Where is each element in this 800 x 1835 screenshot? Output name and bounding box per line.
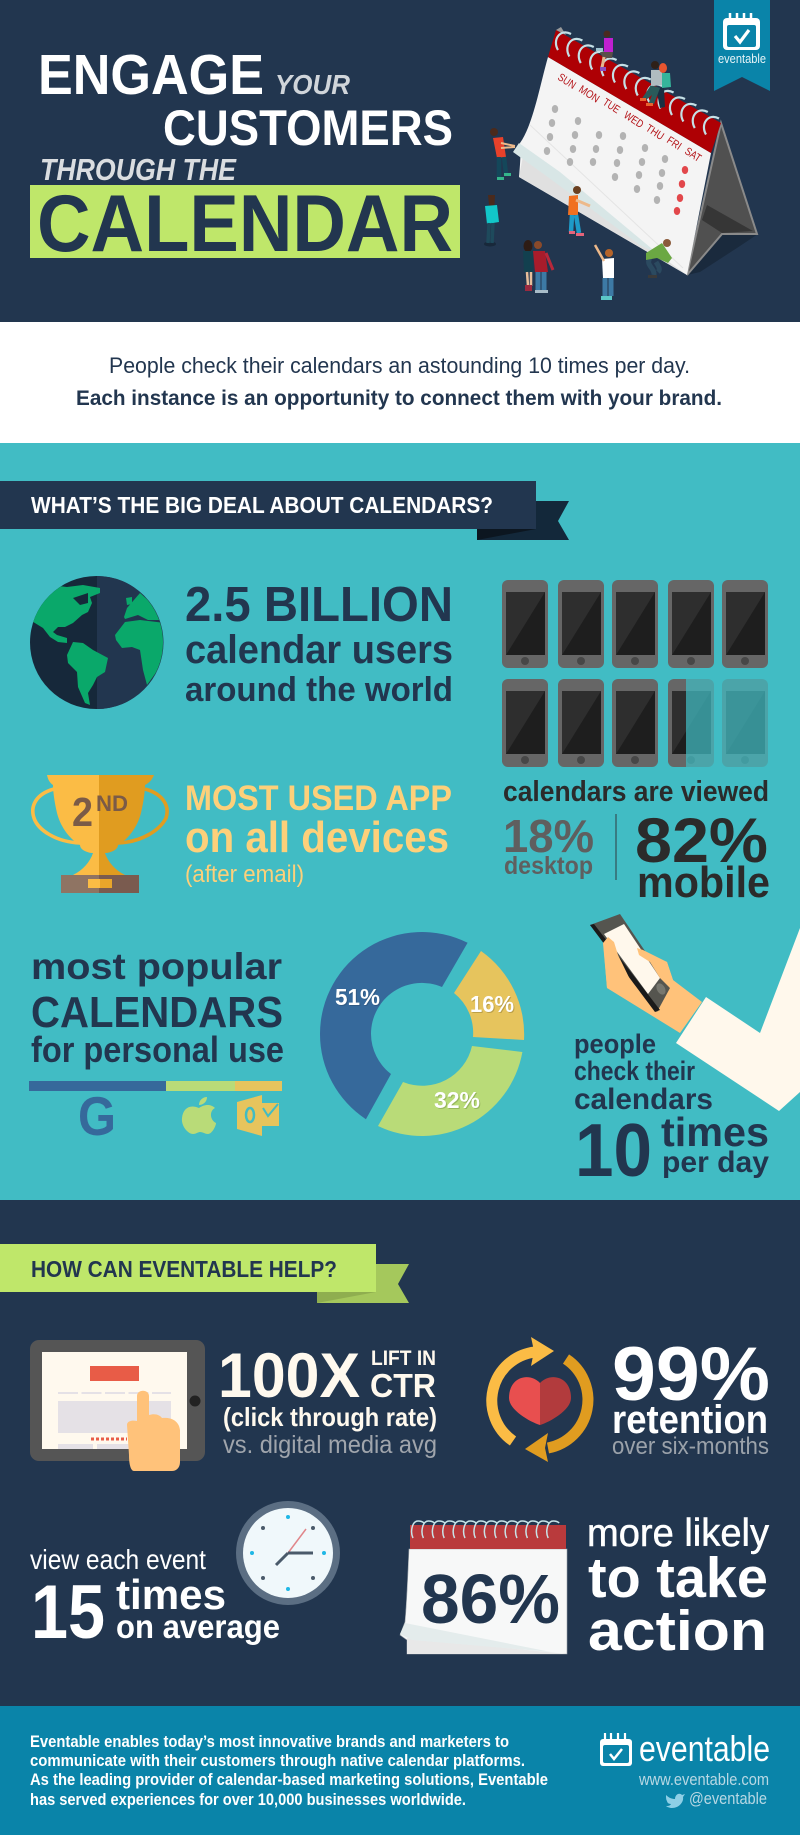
icon: globe bbox=[30, 576, 165, 709]
stat: 99 percent retention: retention bbox=[612, 1398, 768, 1442]
heading: most popular calendars bbox=[31, 946, 284, 1070]
stat: ten checks per day: check their bbox=[574, 1056, 695, 1086]
person: couple standing bbox=[523, 240, 553, 293]
title: YOUR bbox=[275, 69, 351, 100]
stat: ten checks per day: times bbox=[661, 1109, 769, 1155]
icon: google: G bbox=[78, 1085, 116, 1147]
stat: ten checks per day: per day bbox=[662, 1146, 769, 1179]
heading: most popular calendars: most popular bbox=[31, 946, 282, 987]
stat: 15 views on average: times bbox=[116, 1571, 226, 1618]
stat: ten checks per day bbox=[574, 1029, 769, 1192]
heading ribbon: big deal: WHAT’S THE BIG DEAL ABOUT CALENDARS? bbox=[31, 492, 493, 518]
footer text: As the leading provider of calendar-based marketing solutions, Eventable bbox=[30, 1770, 548, 1789]
title: ENGAGE bbox=[38, 43, 264, 107]
stat: 100x lift in ctr: (click through rate) bbox=[223, 1402, 437, 1432]
intro text: People check their calendars an astounding 10 times per day. bbox=[109, 353, 690, 378]
slice: outlook 16 percent bbox=[454, 951, 524, 1040]
stat: 2.5 billion users: calendar users bbox=[185, 628, 453, 672]
stat: calendars viewed desktop vs mobile: calendars are viewed bbox=[503, 776, 769, 808]
icon: apple bbox=[182, 1097, 216, 1134]
stat: calendars viewed desktop vs mobile: desktop bbox=[504, 852, 593, 880]
intro text bbox=[76, 353, 722, 410]
stat: 100x lift in ctr bbox=[218, 1341, 437, 1459]
stat: 15 views on average: view each event bbox=[30, 1544, 206, 1575]
heading ribbon: big deal bbox=[0, 481, 569, 540]
footer links: www.eventable.com bbox=[638, 1770, 769, 1789]
person: seated couple on top bbox=[640, 61, 671, 108]
icon: heart with retention arrows bbox=[492, 1337, 588, 1462]
stat: most used app: on all devices bbox=[185, 813, 449, 862]
heading ribbon: how can eventable help: HOW CAN EVENTABLE HELP? bbox=[31, 1256, 337, 1282]
stat: 15 views on average: on average bbox=[116, 1608, 280, 1645]
stat: most used app bbox=[185, 779, 452, 888]
icon: eventable badge bbox=[714, 0, 770, 91]
heading: most popular calendars: CALENDARS bbox=[31, 988, 283, 1037]
title: CALENDAR bbox=[37, 179, 453, 269]
heading: most popular calendars: for personal use bbox=[31, 1029, 284, 1070]
title: THROUGH THE bbox=[40, 152, 237, 187]
icon: tear-off calendar page bbox=[400, 1521, 567, 1654]
illustration: desk calendar with people: SUN bbox=[555, 71, 578, 92]
person: man in green lifting page bbox=[646, 239, 672, 278]
donut labels: 51% bbox=[336, 985, 381, 1011]
stat: most used app: (after email) bbox=[185, 861, 304, 888]
icon: trophy: ND bbox=[96, 791, 128, 816]
donut labels: 16% bbox=[471, 992, 515, 1018]
stat: 100x lift in ctr: CTR bbox=[370, 1367, 436, 1404]
stat: calendars viewed desktop vs mobile: 18% bbox=[503, 810, 594, 862]
donut labels: 16% bbox=[470, 991, 514, 1017]
stat: 15 views on average bbox=[30, 1544, 280, 1655]
footer text: communicate with their customers through native calendar platforms. bbox=[30, 1751, 525, 1770]
icon: eventable badge: eventable bbox=[718, 51, 766, 66]
footer logo bbox=[600, 1728, 770, 1769]
stat: calendars viewed desktop vs mobile bbox=[503, 776, 770, 907]
stat: 100x lift in ctr: vs. digital media avg bbox=[223, 1431, 437, 1459]
stat: 99 percent retention bbox=[612, 1332, 770, 1460]
illustration: desk calendar with people bbox=[484, 27, 758, 300]
stat: ten checks per day: people bbox=[574, 1029, 656, 1059]
icon: twitter bird bbox=[666, 1794, 685, 1808]
person: man in orange pushing page bbox=[568, 186, 590, 236]
stat: 99 percent retention: over six-months bbox=[612, 1433, 769, 1460]
illustration: desk calendar with people: WED bbox=[621, 109, 646, 131]
footer text: has served experiences for over 10,000 businesses worldwide. bbox=[30, 1790, 466, 1809]
illustration: desk calendar with people: MON bbox=[576, 83, 601, 106]
donut labels: 51% bbox=[335, 984, 380, 1010]
icon: tablet with tapping hand bbox=[30, 1340, 205, 1471]
illustration: desk calendar with people: TUE bbox=[600, 96, 622, 116]
footer text: Eventable enables today’s most innovative brands and marketers to bbox=[30, 1732, 509, 1751]
donut labels: 32% bbox=[435, 1088, 481, 1114]
donut chart: calendar share bbox=[320, 932, 524, 1136]
icon: outlook bbox=[237, 1095, 279, 1136]
icon: trophy: 2 bbox=[72, 789, 93, 835]
donut labels: 32% bbox=[434, 1087, 480, 1113]
stat: 2.5 billion users bbox=[185, 578, 453, 709]
stat: more likely to take action bbox=[587, 1512, 769, 1663]
person: man in red pulling page bbox=[490, 128, 515, 180]
illustration: desk calendar with people: SAT bbox=[682, 145, 703, 165]
stat: 100x lift in ctr: LIFT IN bbox=[371, 1347, 436, 1370]
stat: most used app: MOST USED APP bbox=[185, 779, 452, 818]
stat: more likely to take action: action bbox=[588, 1599, 767, 1663]
stat: ten checks per day: calendars bbox=[574, 1083, 713, 1116]
stat: 99 percent retention: 99% bbox=[612, 1332, 770, 1417]
icon: trophy bbox=[33, 775, 167, 893]
donut labels bbox=[335, 984, 515, 1114]
illustration: desk calendar with people: FRI bbox=[664, 134, 683, 153]
icon: tear-off calendar page: 86% bbox=[421, 1560, 560, 1638]
person: seated woman on top bbox=[596, 30, 613, 71]
intro text: Each instance is an opportunity to connect them with your brand. bbox=[76, 387, 722, 410]
stat: more likely to take action: to take bbox=[588, 1546, 768, 1610]
icon: clock bbox=[236, 1501, 340, 1605]
illustration: desk calendar with people: THU bbox=[643, 122, 666, 143]
person: woman in teal bbox=[484, 195, 499, 246]
stat: 100x lift in ctr: 100X bbox=[218, 1341, 360, 1411]
stat: calendars viewed desktop vs mobile: 82% bbox=[635, 806, 768, 876]
stat: 2.5 billion users: 2.5 BILLION bbox=[185, 578, 453, 632]
title bbox=[30, 43, 460, 269]
stacked bar: calendar share bbox=[29, 1081, 282, 1091]
person: man in white pointing up bbox=[595, 245, 614, 300]
stat: calendars viewed desktop vs mobile: mobile bbox=[637, 858, 770, 907]
icon: phones 82 percent pictogram bbox=[502, 580, 768, 767]
footer text bbox=[30, 1732, 548, 1809]
footer logo: eventable bbox=[639, 1728, 770, 1769]
title: CUSTOMERS bbox=[163, 100, 453, 156]
slice: apple 32 percent bbox=[378, 1046, 522, 1136]
footer links bbox=[638, 1770, 769, 1808]
stat: more likely to take action: more likely bbox=[587, 1512, 769, 1555]
slice: google 51 percent bbox=[320, 932, 468, 1119]
stat: 2.5 billion users: around the world bbox=[185, 671, 453, 709]
footer links: @eventable bbox=[689, 1789, 767, 1808]
stat: 15 views on average: 15 bbox=[31, 1570, 105, 1655]
stat: ten checks per day: 10 bbox=[575, 1108, 652, 1192]
heading ribbon: how can eventable help bbox=[0, 1244, 409, 1303]
illustration: hand holding phone bbox=[590, 914, 800, 1111]
